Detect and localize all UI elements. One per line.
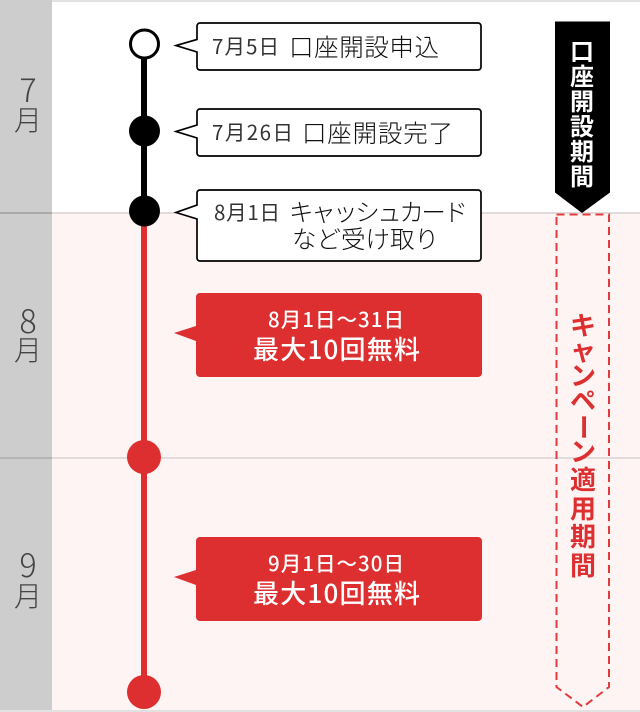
month label: August: 月: [14, 329, 42, 369]
month label: September: 月: [14, 575, 42, 615]
banner: campaign period: ャ: [570, 331, 596, 368]
callout: August campaign: 8月1日〜31日: [268, 303, 404, 333]
marker: July 26: [129, 116, 160, 146]
month label: July: 月: [14, 99, 42, 139]
banner: account opening period: 口: [570, 32, 594, 67]
banner: campaign period: ン: [570, 356, 596, 393]
callout: August campaign: 最大10回無料: [253, 330, 420, 367]
banner: campaign period: 期: [570, 517, 596, 554]
callout: September campaign: [174, 537, 482, 621]
callout: August campaign: [174, 293, 482, 377]
banner: campaign period: ン: [570, 432, 596, 469]
callout: August 1 card receipt: など受け取り: [292, 221, 439, 256]
timeline: black segment: [141, 44, 147, 212]
banner: campaign period: 用: [570, 489, 596, 526]
month label: July: [14, 66, 42, 139]
month label: September: 9: [19, 541, 37, 587]
banner: campaign period: 適: [570, 460, 596, 497]
callout: July 5 account application: 口座開設申込: [289, 29, 439, 64]
callout: September campaign: 最大10回無料: [253, 574, 420, 611]
callout: July 26 account opened: 口座開設完了: [302, 115, 453, 150]
banner: campaign period: ー: [566, 414, 603, 440]
callout: July 5 account application: [176, 23, 481, 70]
banner: account opening period: 設: [570, 107, 594, 142]
banner: account opening period: 期: [570, 132, 594, 167]
month column: [0, 0, 52, 712]
banner: campaign period: ペ: [570, 381, 596, 418]
month label: September: [14, 541, 42, 615]
banner: account opening period: [555, 22, 610, 213]
marker: August 31: [127, 440, 161, 474]
callout: July 26 account opened: 7月26日: [212, 116, 293, 146]
banner: campaign period: 間: [570, 546, 596, 583]
timeline: red segment: [141, 212, 147, 692]
callout: August 1 card receipt: 8月1日: [214, 196, 280, 226]
marker: September 30: [127, 675, 161, 709]
marker: July 5: [130, 30, 158, 58]
banner: account opening period: 開: [570, 82, 594, 117]
callout: July 26 account opened: [176, 109, 481, 156]
banner: campaign period: [556, 214, 609, 707]
banner: account opening period: 座: [570, 57, 594, 92]
month label: August: 8: [19, 297, 37, 343]
banner: account opening period: 間: [570, 157, 594, 192]
callout: August 1 card receipt: [176, 190, 481, 261]
month label: August: [14, 297, 42, 369]
marker: August 1: [129, 196, 160, 226]
callout: August 1 card receipt: キャッシュカード: [289, 194, 468, 229]
callout: September campaign: 9月1日〜30日: [268, 547, 404, 577]
banner: campaign period: キ: [570, 306, 596, 343]
month label: July: 7: [19, 66, 37, 112]
callout: July 5 account application: 7月5日: [212, 30, 279, 60]
